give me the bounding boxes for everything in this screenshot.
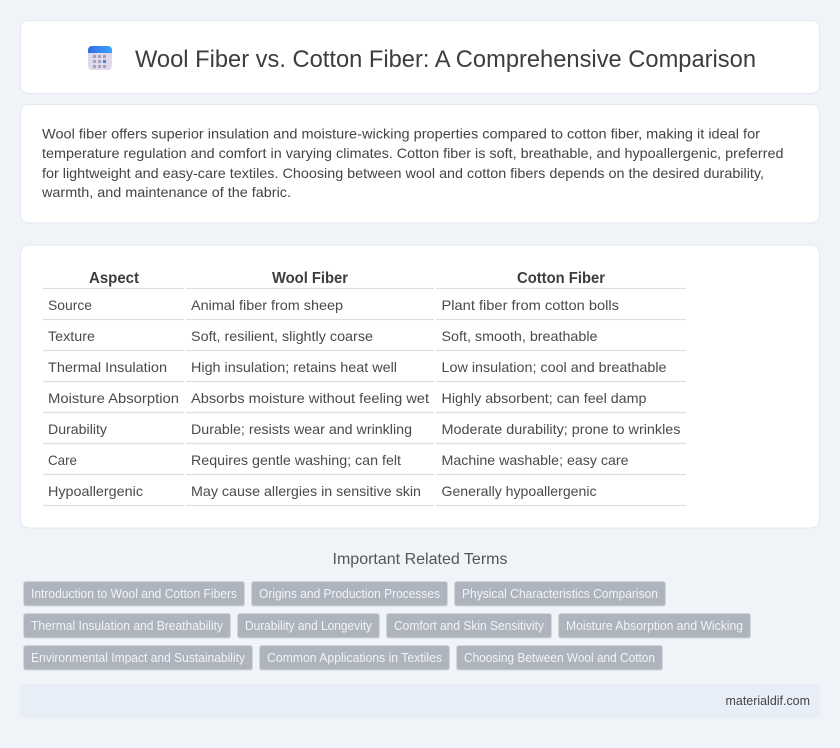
- table row: source: [43, 297, 686, 320]
- tag: Thermal Insulation and Breathability: [31, 619, 224, 633]
- table row: care: [43, 452, 686, 474]
- table row: thermal insulation: Low insulation; cool and breathable: [442, 359, 667, 375]
- table row: moisture absorption: [43, 390, 686, 412]
- tag: [238, 614, 380, 638]
- heading: related terms: Important Related Terms: [332, 551, 508, 568]
- table row: source: Animal fiber from sheep: [191, 297, 343, 313]
- tag: [454, 582, 666, 606]
- table row: care: Machine washable; easy care: [442, 452, 629, 468]
- summary paragraph: warmth, and maintenance of the fabric.: [41, 184, 291, 200]
- table row: moisture absorption: Moisture Absorption: [48, 390, 179, 406]
- table row: source: Source: [48, 297, 92, 313]
- tag: [24, 646, 252, 670]
- tag: [24, 614, 230, 638]
- tag: Environmental Impact and Sustainability: [31, 651, 246, 665]
- tag: Choosing Between Wool and Cotton: [464, 651, 655, 665]
- summary paragraph: [41, 126, 784, 200]
- panel: header: [20, 20, 820, 94]
- footer: [20, 684, 820, 718]
- tag: [456, 646, 662, 670]
- table row: care: Requires gentle washing; can felt: [191, 452, 401, 468]
- table row: thermal insulation: High insulation; retains heat well: [191, 359, 397, 375]
- table row: texture: Texture: [48, 328, 95, 344]
- tag: Durability and Longevity: [245, 619, 373, 633]
- table row: thermal insulation: [43, 359, 686, 382]
- table row: thermal insulation: Thermal Insulation: [48, 359, 167, 375]
- title: Wool Fiber vs. Cotton Fiber: A Comprehensive Comparison: [135, 46, 756, 73]
- tag: Physical Characteristics Comparison: [462, 587, 658, 601]
- tag: Moisture Absorption and Wicking: [566, 619, 743, 633]
- table row: texture: Soft, resilient, slightly coarse: [191, 328, 373, 344]
- table row: durability: Moderate durability; prone to wrinkles: [442, 421, 680, 437]
- table row: hypoallergenic: [43, 483, 686, 506]
- tag: Origins and Production Processes: [259, 587, 440, 601]
- tag: [558, 614, 750, 638]
- table row: durability: Durability: [48, 421, 107, 437]
- table row: texture: Soft, smooth, breathable: [442, 328, 598, 344]
- table row: hypoallergenic: May cause allergies in sensitive skin: [191, 483, 421, 499]
- table row: moisture absorption: Absorbs moisture without feeling wet: [191, 390, 429, 406]
- table row: hypoallergenic: Hypoallergenic: [48, 483, 143, 499]
- panel: comparison table: [20, 245, 820, 528]
- table row: texture: [43, 328, 686, 350]
- tag: [24, 582, 244, 606]
- table header row: Aspect: [89, 270, 140, 287]
- tag: [252, 582, 448, 606]
- table row: durability: Durable; resists wear and wrinkling: [191, 421, 412, 437]
- summary paragraph: for lightweight and easy-care textiles. Choosing between wool and cotton fibers depends on the desired durability,: [42, 165, 764, 181]
- related term tags: [24, 582, 750, 670]
- table row: durability: [43, 421, 686, 444]
- tag: [260, 646, 450, 670]
- summary paragraph: temperature regulation and comfort in varying climates. Cotton fiber is soft, breathable, and hypoallergenic, preferred: [42, 145, 784, 161]
- table row: hypoallergenic: Generally hypoallergenic: [442, 483, 596, 499]
- table header row: Cotton Fiber: [517, 270, 605, 287]
- tag: Introduction to Wool and Cotton Fibers: [31, 587, 237, 601]
- icon: calendar: [88, 46, 112, 70]
- tag: [386, 614, 552, 638]
- table header row: [43, 270, 686, 288]
- tag: Comfort and Skin Sensitivity: [394, 619, 545, 633]
- table row: moisture absorption: Highly absorbent; can feel damp: [442, 390, 647, 406]
- tag: Common Applications in Textiles: [267, 651, 442, 665]
- footer source text: materialdif.com: [726, 693, 810, 708]
- table row: source: Plant fiber from cotton bolls: [442, 297, 619, 313]
- panel: summary: [20, 104, 820, 223]
- table row: care: Care: [48, 452, 77, 468]
- summary paragraph: Wool fiber offers superior insulation and moisture-wicking properties compared to cotton fiber, making it ideal for: [42, 126, 760, 142]
- table header row: Wool Fiber: [272, 270, 348, 287]
